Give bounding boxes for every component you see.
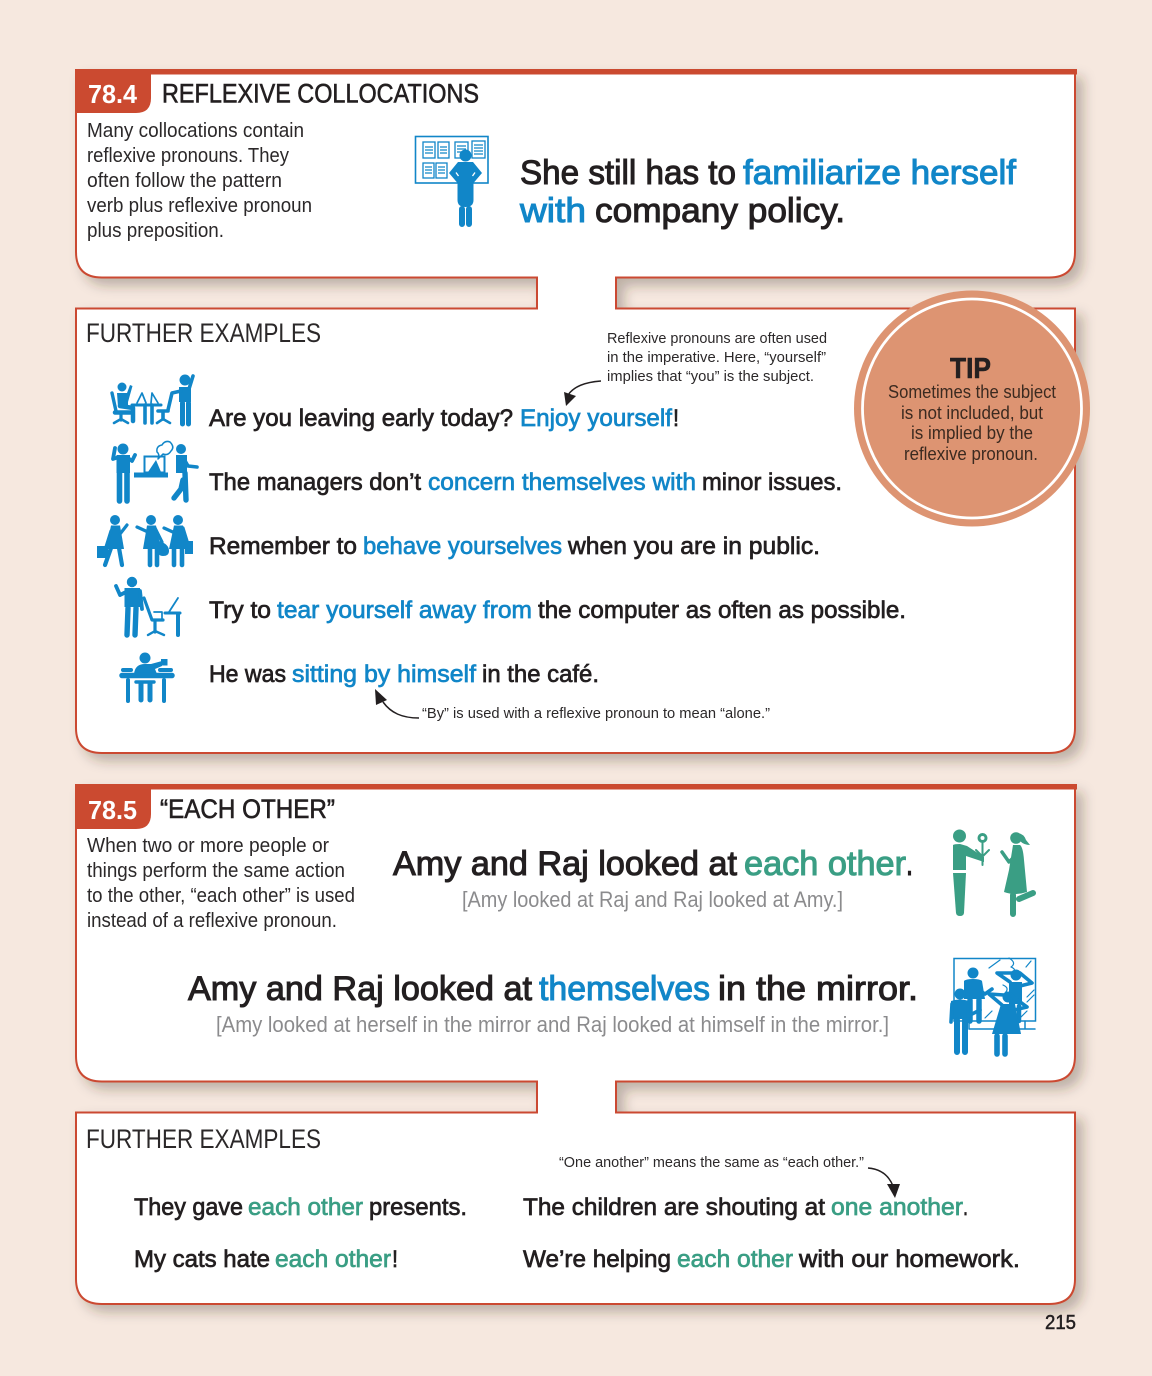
heading: further examples 78.5: FURTHER EXAMPLES — [86, 1124, 321, 1154]
example sentence: enjoy yourself: Enjoy yourself — [520, 405, 672, 432]
icon: woman at notice board — [416, 136, 488, 224]
icon: office workers at desks — [112, 374, 193, 424]
annotation: reflexive pronouns in the imperative: Reflexive pronouns are often used — [607, 330, 827, 347]
icon: two people at mirror — [951, 958, 1036, 1054]
text block: reflexive collocations intro: often follow the pattern — [87, 170, 282, 192]
arrow: to enjoy yourself — [564, 381, 601, 406]
example sentence: concern themselves with: minor issues. — [702, 469, 842, 496]
example sentence: concern themselves with: The managers don’t — [209, 469, 421, 496]
example sentence: tear yourself away from: tear yourself away from — [277, 597, 532, 624]
main example sentence: familiarize herself with: company policy. — [595, 192, 845, 230]
main example sentence: themselves — [188, 970, 918, 1037]
arrow: to sitting by himself — [375, 689, 419, 718]
text block: reflexive collocations intro — [87, 120, 312, 242]
main example sentence: each other: [Amy looked at Raj and Raj looked at Amy.] — [462, 887, 843, 912]
arrow: to one another — [868, 1168, 900, 1198]
text block: each other intro: instead of a reflexive pronoun. — [87, 910, 337, 932]
main example sentence: familiarize herself with — [519, 154, 1016, 230]
example sentence: behave yourselves: Remember to — [209, 533, 357, 560]
icon: man offering flower to woman — [953, 830, 1033, 916]
example sentence: helping each other: with our homework. — [798, 1246, 1020, 1273]
example sentence: helping each other: each other — [677, 1246, 793, 1273]
tip badge — [854, 290, 1090, 526]
text block: reflexive collocations intro: verb plus reflexive pronoun — [87, 195, 312, 217]
icon: man alone at cafe table — [122, 652, 172, 701]
example sentence: enjoy yourself: Are you leaving early today? — [209, 405, 513, 432]
example sentence: one another: The children are shouting at — [523, 1194, 825, 1221]
example sentence: sitting by himself — [209, 661, 599, 688]
example sentence: behave yourselves: behave yourselves — [363, 533, 562, 560]
example sentence: tear yourself away from: Try to — [209, 597, 271, 624]
example sentence: enjoy yourself: ! — [673, 405, 679, 432]
tip badge: TIP — [950, 353, 991, 385]
example sentence: sitting by himself: sitting by himself — [292, 661, 476, 688]
example sentence: tear yourself away from: the computer as often as possible. — [538, 597, 906, 624]
heading: further examples 78.4: FURTHER EXAMPLES — [86, 318, 321, 348]
example sentence: sitting by himself: in the café. — [482, 661, 599, 688]
panel: 78.5 frame joined to further examples — [75, 784, 1077, 1304]
example sentence: helping each other — [523, 1246, 1020, 1273]
example sentence: tear yourself away from — [209, 597, 906, 624]
text block: reflexive collocations intro: Many collocations contain — [87, 120, 304, 142]
example sentence: one another: one another — [831, 1194, 963, 1221]
example sentence: my cats hate each other — [134, 1246, 398, 1273]
annotation: by means alone: “By” is used with a reflexive pronoun to mean “alone.” — [422, 705, 770, 722]
annotation: reflexive pronouns in the imperative: in the imperative. Here, “yourself” — [607, 349, 826, 366]
main example sentence: familiarize herself with: with — [519, 192, 586, 230]
example sentence: sitting by himself: He was — [209, 661, 286, 688]
text block: each other intro: When two or more people or — [87, 835, 329, 857]
main example sentence: each other: . — [906, 845, 913, 883]
example sentence: my cats hate each other: My cats hate — [134, 1246, 270, 1273]
tip badge: reflexive pronoun. — [904, 444, 1038, 464]
example sentence: behave yourselves — [209, 533, 820, 560]
icon: three women with shopping bags — [97, 515, 193, 565]
icon: man leaving computer desk — [116, 577, 180, 635]
page number: 215 — [1045, 1312, 1076, 1334]
example sentence: concern themselves with — [209, 469, 842, 496]
example sentence: they gave each other presents: They gave — [134, 1194, 243, 1221]
section tab: 78.4: 78.4 — [88, 79, 138, 109]
text block: reflexive collocations intro: reflexive pronouns. They — [87, 145, 289, 167]
main example sentence: themselves: themselves — [539, 970, 710, 1008]
annotation: one another: “One another” means the same as “each other.” — [559, 1154, 864, 1171]
tip badge: is implied by the — [911, 423, 1033, 443]
text block: each other intro: to the other, “each other” is used — [87, 885, 355, 907]
main example sentence: each other: each other — [744, 845, 906, 883]
example sentence: they gave each other presents — [134, 1194, 467, 1221]
example sentence: one another — [523, 1194, 968, 1221]
main example sentence: each other — [393, 845, 913, 912]
text block: each other intro — [87, 835, 355, 932]
example sentence: helping each other: We’re helping — [523, 1246, 671, 1273]
panel: 78.4 frame joined to further examples — [75, 69, 1077, 753]
example sentence: my cats hate each other: each other — [275, 1246, 391, 1273]
main example sentence: themselves: in the mirror. — [718, 970, 918, 1008]
section tab: 78.5: 78.5 — [88, 795, 137, 825]
annotation: reflexive pronouns in the imperative: implies that “you” is the subject. — [607, 368, 814, 385]
example sentence: one another: . — [963, 1194, 968, 1221]
main example sentence: familiarize herself with: She still has to — [520, 154, 736, 192]
example sentence: enjoy yourself — [209, 405, 679, 432]
section tab: 78.5 — [75, 788, 151, 829]
text block: each other intro: things perform the same action — [87, 860, 345, 882]
main example sentence: each other: Amy and Raj looked at — [393, 845, 737, 883]
annotation: reflexive pronouns in the imperative — [607, 330, 827, 385]
tip badge: Sometimes the subject — [888, 382, 1056, 402]
example sentence: concern themselves with: concern themselves with — [428, 469, 696, 496]
example sentence: they gave each other presents: presents. — [369, 1194, 467, 1221]
main example sentence: themselves: [Amy looked at herself in the mirror and Raj looked at himself in the mirror.] — [216, 1012, 889, 1037]
text block: reflexive collocations intro: plus preposition. — [87, 220, 224, 242]
heading: reflexive collocations: REFLEXIVE COLLOCATIONS — [162, 78, 479, 108]
main example sentence: themselves: Amy and Raj looked at — [188, 970, 532, 1008]
heading: each other: “EACH OTHER” — [160, 794, 335, 824]
example sentence: my cats hate each other: ! — [392, 1246, 398, 1273]
section tab: 78.4 — [75, 73, 151, 113]
icon: managers and laptop — [113, 441, 197, 501]
example sentence: behave yourselves: when you are in public. — [567, 533, 820, 560]
example sentence: they gave each other presents: each other — [248, 1194, 363, 1221]
main example sentence: familiarize herself with: familiarize herself — [743, 154, 1016, 192]
tip badge: is not included, but — [901, 403, 1043, 423]
